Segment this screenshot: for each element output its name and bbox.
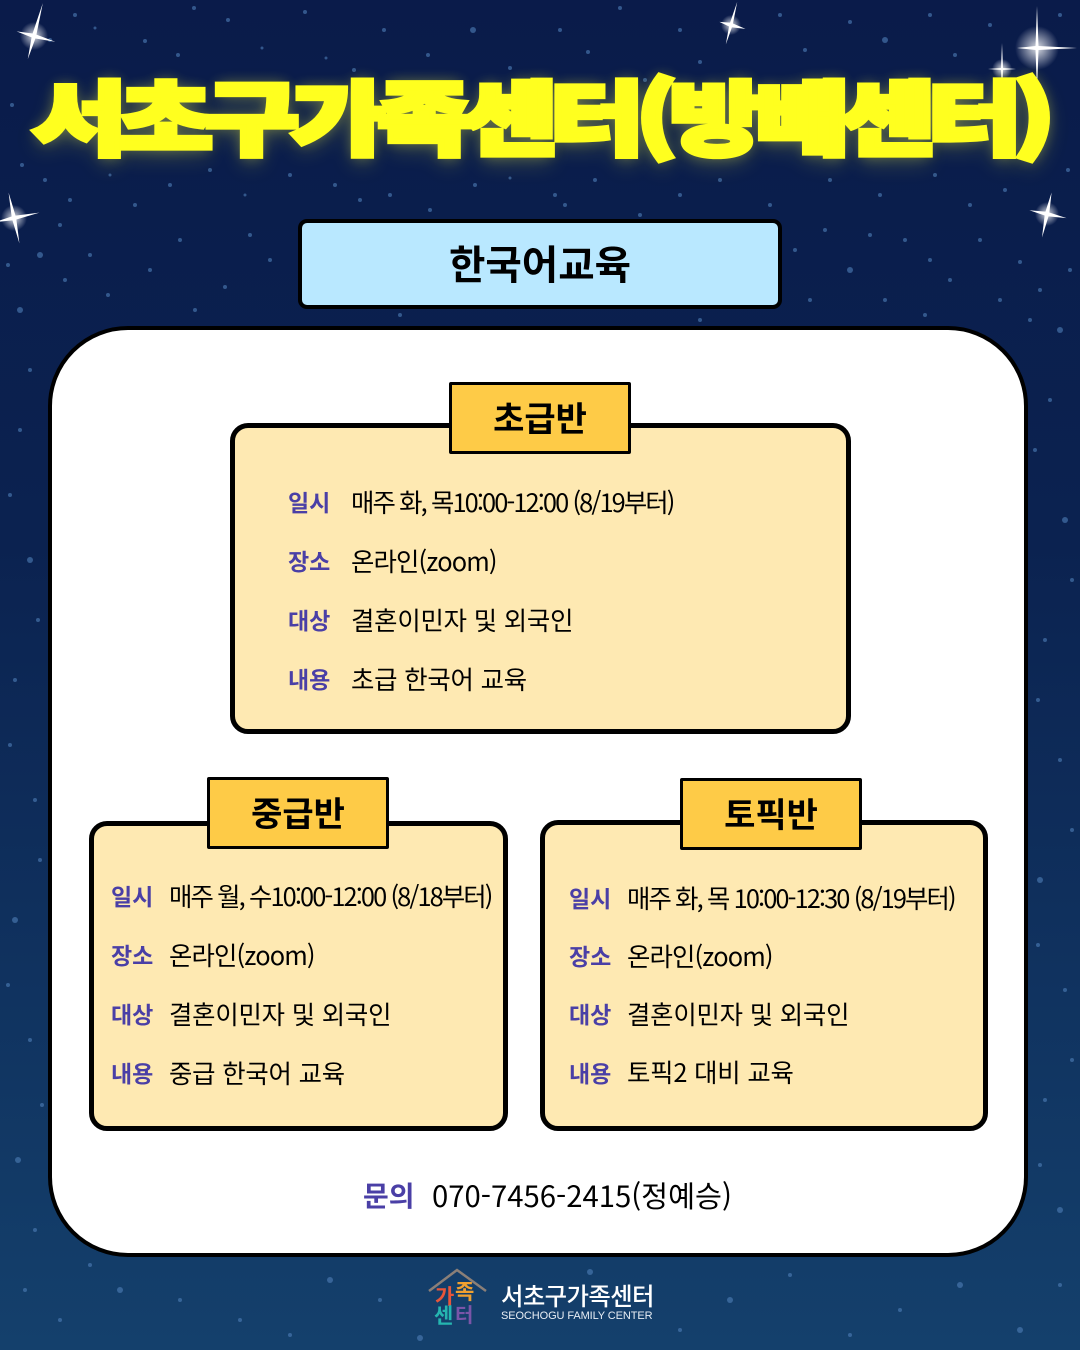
white main panel xyxy=(48,326,1028,1257)
logo xyxy=(428,1268,654,1328)
beginner details: 내용 xyxy=(288,661,330,695)
panel: TOPIK xyxy=(540,778,988,1131)
TOPIK details: 매주 화, 목 10:00-12:30 (8/19부터) xyxy=(627,880,955,916)
contact: 070-7456-2415(정예승) xyxy=(432,1174,732,1216)
beginner details: 결혼이민자 및 외국인 xyxy=(351,602,573,638)
intermediate details: 일시 xyxy=(111,878,153,912)
subtitle banner xyxy=(298,219,782,309)
intermediate details xyxy=(111,878,491,1091)
heading: TOPIK: 토픽반 xyxy=(724,788,818,837)
heading: TOPIK xyxy=(680,778,862,850)
subtitle banner: 한국어교육 xyxy=(449,234,631,291)
icon: house logo: 가 xyxy=(435,1281,454,1311)
TOPIK details: 결혼이민자 및 외국인 xyxy=(627,996,849,1032)
beginner details: 장소 xyxy=(288,543,330,577)
logo: SEOCHOGU FAMILY CENTER xyxy=(501,1310,652,1322)
TOPIK details: 장소 xyxy=(569,938,611,972)
stars xyxy=(0,0,1077,248)
TOPIK details xyxy=(569,880,955,1090)
heading: beginner: 초급반 xyxy=(493,392,587,441)
TOPIK details: 대상 xyxy=(569,996,611,1030)
icon: house logo xyxy=(428,1268,487,1328)
intermediate details: 중급 한국어 교육 xyxy=(169,1055,345,1091)
beginner details xyxy=(288,484,673,697)
beginner details: 대상 xyxy=(288,602,330,636)
icon: house logo: 족 xyxy=(455,1276,474,1306)
beginner details: 매주 화, 목10:00-12:00 (8/19부터) xyxy=(351,484,673,520)
TOPIK details: 온라인(zoom) xyxy=(627,938,773,974)
heading: beginner xyxy=(449,382,631,454)
contact: 문의 xyxy=(363,1175,415,1215)
logo text: 서초구가족센터 xyxy=(501,1278,654,1313)
beginner details: 온라인(zoom) xyxy=(351,543,497,579)
intermediate details: 대상 xyxy=(111,996,153,1030)
beginner details: 초급 한국어 교육 xyxy=(351,661,527,697)
heading: intermediate: 중급반 xyxy=(251,787,345,836)
intermediate details: 내용 xyxy=(111,1055,153,1089)
intermediate details: 장소 xyxy=(111,937,153,971)
panel: intermediate xyxy=(89,777,508,1131)
panel: beginner xyxy=(230,382,851,734)
icon: house logo: 터 xyxy=(455,1299,473,1328)
intermediate details: 온라인(zoom) xyxy=(169,937,315,973)
beginner details: 일시 xyxy=(288,484,330,518)
TOPIK details: 일시 xyxy=(569,880,611,914)
intermediate details: 매주 월, 수10:00-12:00 (8/18부터) xyxy=(169,878,491,914)
TOPIK details: 토픽2 대비 교육 xyxy=(627,1054,794,1090)
intermediate details: 결혼이민자 및 외국인 xyxy=(169,996,391,1032)
TOPIK details: 내용 xyxy=(569,1055,611,1089)
title: 서초구가족센터(방배센터) xyxy=(33,55,1047,172)
heading: intermediate xyxy=(207,777,389,849)
